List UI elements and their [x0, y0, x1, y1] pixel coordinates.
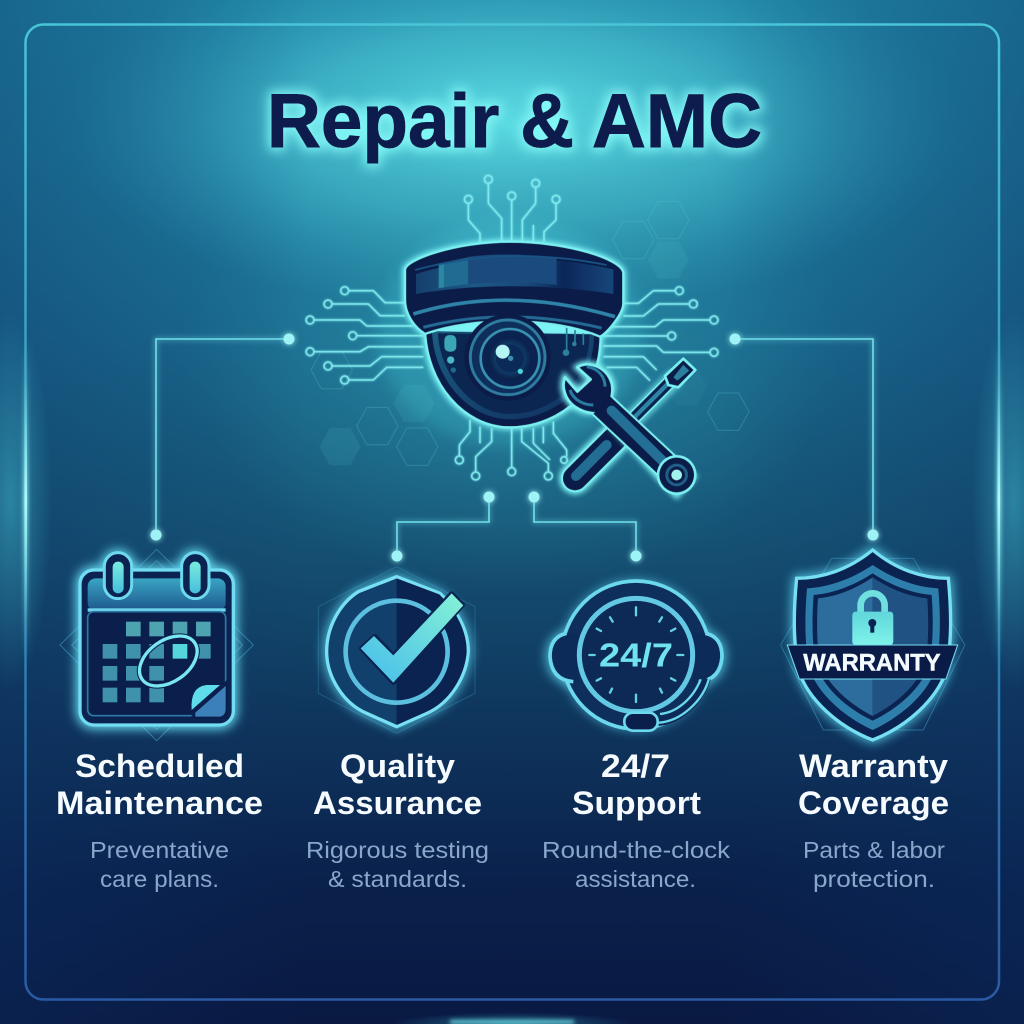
label: 24/7 support: Round-the-clock: [542, 837, 730, 863]
icon: calendar: [60, 549, 253, 741]
label: warranty coverage: Parts & labor: [803, 837, 945, 863]
circuit traces: [306, 175, 718, 480]
label: quality assurance: [306, 748, 489, 892]
hexagon background pattern: [311, 201, 749, 465]
icon: warranty shield: [781, 550, 965, 740]
camera ball: [425, 327, 601, 427]
label: quality assurance: Assurance: [313, 785, 482, 821]
wrench: [563, 364, 697, 495]
label: scheduled maintenance: Scheduled: [75, 748, 244, 784]
label: quality assurance: & standards.: [328, 866, 467, 892]
label: 24/7 support: Support: [572, 785, 701, 821]
warranty banner: [787, 645, 958, 679]
label: 24/7 support: 24/7: [601, 748, 670, 784]
label: scheduled maintenance: Maintenance: [56, 785, 263, 821]
label: scheduled maintenance: Preventative: [90, 837, 229, 863]
camera and tools illustration: [306, 175, 718, 495]
warranty banner: WARRANTY: [803, 649, 941, 676]
screwdriver: [575, 359, 695, 478]
label: quality assurance: Quality: [340, 748, 455, 784]
label: scheduled maintenance: care plans.: [100, 866, 219, 892]
label: warranty coverage: [798, 748, 949, 892]
camera halo: [405, 242, 623, 427]
camera lens: [464, 314, 551, 401]
label: warranty coverage: Warranty: [799, 748, 948, 784]
title: Repair & AMC: [267, 79, 762, 164]
label: warranty coverage: Coverage: [798, 785, 949, 821]
icon: 24/7 support headset clock: 24/7: [599, 638, 673, 675]
connector lines: [150, 334, 878, 562]
label: quality assurance: Rigorous testing: [306, 837, 489, 863]
icon: quality check badge: [318, 567, 475, 733]
label: warranty coverage: protection.: [813, 866, 935, 892]
label: 24/7 support: [542, 748, 730, 892]
label: scheduled maintenance: [56, 748, 263, 892]
label: 24/7 support: assistance.: [575, 866, 696, 892]
camera housing: [405, 242, 623, 337]
lock: [852, 593, 893, 645]
icon: 24/7 support headset clock: [548, 580, 724, 731]
